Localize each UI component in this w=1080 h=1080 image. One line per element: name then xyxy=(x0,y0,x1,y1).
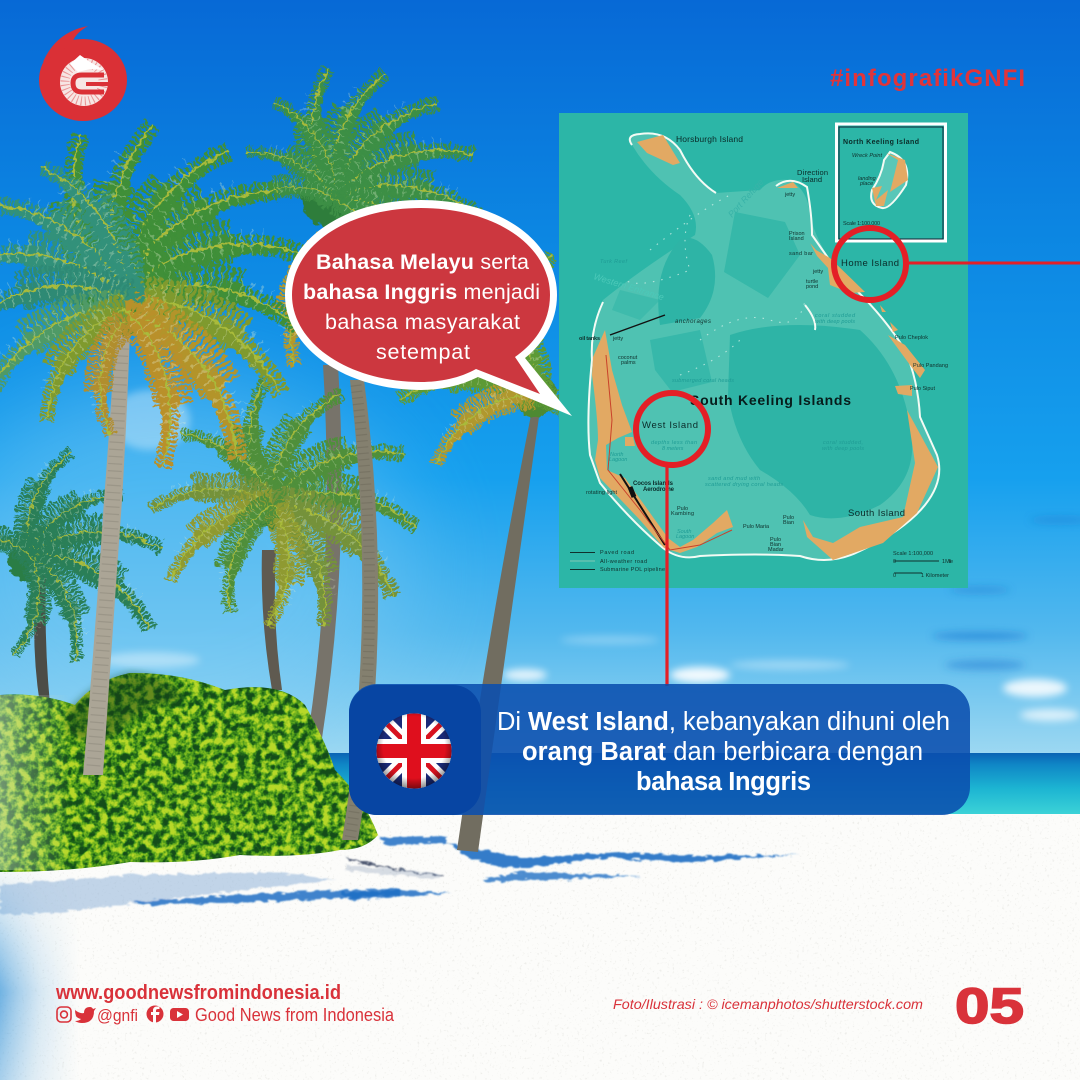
map: labels: jetty xyxy=(612,336,623,342)
background: sky glow behind palms xyxy=(0,380,410,760)
icon: twitter xyxy=(75,1007,96,1023)
background: clouds xyxy=(100,390,1080,721)
background: sea xyxy=(0,753,1080,817)
map: labels: Scale 1:100,000 xyxy=(893,551,933,557)
background: sand xyxy=(0,814,1080,1080)
info box text xyxy=(497,708,950,796)
palm trunks: front xyxy=(83,300,378,840)
map: atoll surf line xyxy=(588,133,939,560)
map: lagoon deep water xyxy=(612,212,912,518)
palm: lower middle xyxy=(151,379,417,626)
map: labels: Pulo xyxy=(770,537,781,543)
icon: facebook xyxy=(146,1006,164,1023)
map: reef shallows xyxy=(588,134,939,559)
palm: large left xyxy=(0,124,302,467)
info box text: bahasa Inggris xyxy=(636,768,811,796)
map: labels: Island xyxy=(789,236,804,242)
bubble text: setempat xyxy=(376,340,470,364)
palm trunks: rear xyxy=(34,365,540,852)
background: sky xyxy=(0,0,1080,770)
map: labels: Pulo Siput xyxy=(910,386,935,392)
map: labels: coral studded xyxy=(815,313,856,319)
map: labels: turtle xyxy=(806,279,818,285)
map: islands xyxy=(592,135,938,560)
map: labels: jetty xyxy=(812,269,823,275)
map: labels: Turk Reef xyxy=(600,259,627,265)
map: labels: West Island xyxy=(642,420,698,431)
map: labels: Island xyxy=(802,175,822,184)
map: inset North Keeling: Scale 1:100,000 xyxy=(843,221,880,227)
map: labels: Pulo Pandang xyxy=(913,363,948,369)
bubble text: Bahasa Melayu serta xyxy=(316,250,529,274)
map: inset North Keeling: North Keeling Island xyxy=(843,139,919,146)
map: labels: 8 meters xyxy=(662,446,684,452)
map: labels: South Keeling Islands xyxy=(690,392,851,408)
map: labels: oil tanks xyxy=(579,336,600,342)
map: labels: jetty xyxy=(784,192,795,198)
map: labels: depths less than xyxy=(651,440,697,446)
map: inset North Keeling: place xyxy=(859,181,873,187)
map: labels: Home Island xyxy=(841,258,899,269)
bush xyxy=(0,673,378,872)
map: labels: Madar xyxy=(768,547,784,553)
map: labels: sand and mud with xyxy=(708,476,760,482)
footer: social handles xyxy=(57,1005,395,1025)
map: labels: anchorages xyxy=(675,319,711,325)
map: labels: Horsburgh Island xyxy=(676,134,743,144)
palm: right behind map xyxy=(399,255,610,464)
connector line: Home Island xyxy=(909,262,1080,264)
map: labels: Submarine POL pipeline xyxy=(600,567,665,573)
info box text: orang Barat dan berbicara dengan xyxy=(522,738,923,766)
icon: youtube xyxy=(170,1008,189,1021)
map: labels: South Island xyxy=(848,508,905,519)
map: labels: South xyxy=(677,529,691,535)
connector line: West Island xyxy=(665,466,669,686)
icon: instagram xyxy=(57,1007,71,1022)
map: labels: scattered drying coral heads xyxy=(705,482,783,488)
speech bubble xyxy=(285,200,572,416)
map: labels: palms xyxy=(621,360,636,366)
map: labels: Pulo Cheplok xyxy=(895,335,928,341)
map: labels: Paved road xyxy=(600,550,634,556)
info box text: Di West Island, kebanyakan dihuni oleh xyxy=(497,708,950,736)
footer: social handles: Good News from Indonesia xyxy=(195,1005,395,1025)
map: inset North Keeling xyxy=(836,124,946,241)
map: labels: Pulo xyxy=(783,515,794,521)
map: labels: 0 xyxy=(893,573,896,579)
map: labels: Kambing xyxy=(671,511,694,517)
map: labels: Lagoon xyxy=(676,534,694,540)
map: labels xyxy=(570,134,953,579)
map panel xyxy=(559,113,968,588)
map: labels: Port Refuge xyxy=(726,177,766,219)
bubble text: bahasa Inggris menjadi xyxy=(303,280,540,304)
map: reef specks xyxy=(625,195,805,375)
map: labels: North xyxy=(610,452,623,458)
map: labels: Pulo xyxy=(677,506,688,512)
map: labels: All-weather road xyxy=(600,559,647,565)
map: labels: submerged coral heads xyxy=(672,378,734,384)
map: labels: with deep pools xyxy=(822,446,864,452)
background: sand shadows xyxy=(0,836,800,915)
map: labels: Bian xyxy=(770,542,781,548)
footer: photo credit: Foto/Ilustrasi : © icemanphotos/shutterstock.com xyxy=(613,996,923,1012)
map: labels: sand bar xyxy=(789,251,813,257)
map: labels: coconut xyxy=(618,355,638,361)
bubble text: bahasa masyarakat xyxy=(325,310,520,334)
map: labels: Direction xyxy=(797,168,828,177)
map: labels: Bian xyxy=(783,520,794,526)
background: sand grain xyxy=(0,815,1080,1080)
map: labels: pond xyxy=(806,284,818,290)
map: labels: 1 Mile xyxy=(942,559,953,565)
red circle: West Island xyxy=(636,393,708,465)
background: left edge fade xyxy=(0,872,70,1080)
map: labels: 0 xyxy=(893,559,896,565)
logo: GNFI xyxy=(39,26,127,121)
bubble text xyxy=(303,250,540,364)
palm: back centre xyxy=(239,66,480,366)
map: labels: Western Entrance xyxy=(592,271,665,302)
info box: West Island xyxy=(349,684,970,815)
map: labels: with deep pools xyxy=(815,319,855,325)
map: labels: rotating light xyxy=(586,490,617,496)
map: labels: Lagoon xyxy=(609,457,627,463)
page number: 05 xyxy=(955,978,1024,1034)
footer: website: www.goodnewsfromindonesia.id xyxy=(55,982,341,1004)
map: labels: Prison xyxy=(789,231,805,237)
map: roads and runway xyxy=(606,315,732,550)
map: labels: Aerodrome xyxy=(643,487,675,493)
map: labels: Cocos Islands xyxy=(633,481,674,487)
footer: social handles: @gnfi xyxy=(97,1006,138,1025)
hashtag: #infografikGNFI xyxy=(830,65,1025,92)
map: inset North Keeling: landing xyxy=(858,176,877,182)
palm: far left xyxy=(0,446,164,661)
map: inset North Keeling: Wreck Point xyxy=(852,153,882,159)
red circle: Home Island xyxy=(834,228,906,300)
icon panel: flag xyxy=(349,685,481,815)
map: labels: coral studded, xyxy=(823,440,863,446)
map: labels: 1 Kilometer xyxy=(921,573,949,579)
map: labels: Pulo Maria xyxy=(743,524,770,530)
